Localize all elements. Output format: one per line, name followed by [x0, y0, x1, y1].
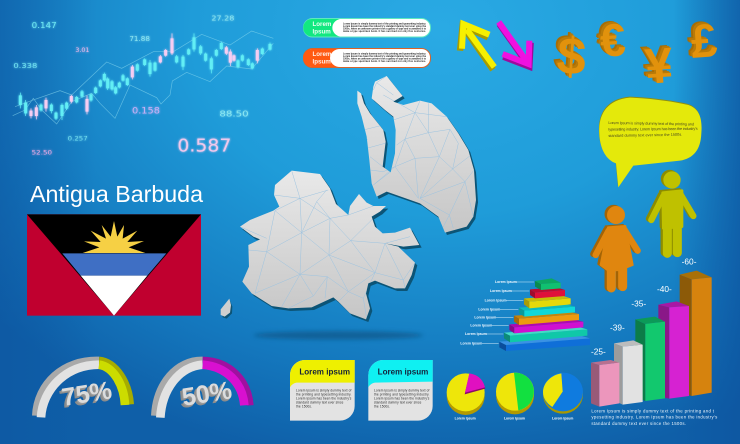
chart figures: 0.338 [13, 62, 37, 70]
layer green [535, 278, 561, 290]
info card cyan: Lorem ipsum [378, 367, 429, 377]
green label pill: Lorem Ipsum is simply dummy text of the printing and typesetting industry. [343, 22, 426, 26]
chart figures: 0.147 [32, 21, 57, 30]
layered pyramid chart [460, 278, 590, 351]
layer blue [499, 336, 590, 351]
bar values: -60- [682, 257, 697, 267]
info card yellow: standard dummy text ever since [296, 401, 344, 405]
bar values: -39- [610, 323, 625, 333]
chart figures: 88.50 [219, 108, 249, 118]
speech bubble: typesetting industry. Lorem Ipsum has been the industry's [608, 127, 698, 132]
bar pink 25 [591, 360, 619, 407]
pyramid labels: Lorem Ipsum [474, 315, 496, 319]
bar chart caption: standard dummy text ever since the 1500s. [591, 421, 686, 426]
bar chart caption: Lorem Ipsum is simply dummy text of the printing and t [591, 408, 715, 413]
green label pill: make a type specimen book. It has survived not only five centuries. [343, 30, 426, 33]
pyramid labels: Lorem Ipsum [490, 289, 512, 293]
pink candlesticks [31, 33, 257, 119]
green label pill: 1500s, when an unknown printer took a galley of type and scrambled it to [343, 28, 427, 30]
icon: dollar symbol: $ [555, 27, 588, 87]
info card yellow: the printing and typesetting industry. [296, 393, 351, 397]
bar chart [591, 257, 717, 426]
orange label pill: Ipsum [312, 58, 331, 66]
info card yellow: Lorem Ipsum is simply dummy text of [296, 389, 351, 393]
bar magenta 40 [658, 301, 689, 399]
icon: magenta arrow down-right [499, 22, 531, 67]
speech bubble [599, 97, 702, 187]
pie chart two [496, 373, 534, 420]
gauge value 75 percent: 75% [60, 376, 114, 412]
bar values: -35- [631, 299, 646, 309]
bar chart caption: ypesetting industry. Lorem Ipsum has been the industry's [591, 415, 717, 420]
green label pill: Lorem [312, 21, 332, 28]
flag of Antigua and Barbuda [27, 214, 201, 316]
info card cyan: Lorem Ipsum is simply dummy text of [374, 389, 429, 393]
chart figures: 27.28 [211, 15, 234, 23]
layer red [530, 287, 565, 298]
chart figures: 0.158 [132, 106, 160, 116]
layer cyan [519, 304, 575, 317]
icon: euro symbol: € [598, 13, 627, 67]
icon: yellow arrow up-left [460, 24, 494, 70]
bar green 35 [635, 317, 665, 401]
orange label pill: 1500s, when an unknown printer took a galley of type and scrambled it to [343, 58, 427, 60]
trend lines [13, 31, 273, 124]
icon: pound symbol: £ [689, 13, 719, 68]
icon: rising sun [83, 221, 145, 253]
green label pill: Lorem Ipsum has been the industry's standard dummy text ever since the [343, 25, 427, 28]
chart figures: 3.01 [75, 47, 89, 54]
title: Antigua Barbuda [30, 181, 203, 207]
layer teal [504, 327, 587, 342]
info card cyan: the printing and typesetting industry. [374, 393, 429, 397]
speech bubble: standard dummy text ever since the 1500s. [608, 133, 682, 138]
small islet [221, 299, 232, 319]
gauge value 50 percent: 50% [180, 376, 234, 412]
pie chart three [543, 373, 583, 420]
pyramid labels: Lorem Ipsum [478, 308, 500, 312]
cyan candlesticks [20, 33, 270, 120]
gauge 75 percent [35, 360, 131, 417]
pyramid leader lines [482, 282, 534, 343]
chart figures: 71.88 [129, 35, 150, 43]
info card cyan: Lorem Ipsum has been the industry's [374, 397, 430, 401]
info card yellow [290, 360, 355, 421]
info card cyan: the 1500s. [374, 405, 390, 409]
bar chart caption [591, 408, 717, 426]
chart figures: 0.587 [177, 136, 231, 156]
chart figures [13, 15, 249, 157]
layer yellow [524, 296, 571, 308]
pyramid labels: Lorem Ipsum [465, 332, 487, 336]
pyramid labels [460, 280, 517, 345]
Barbuda island [357, 76, 478, 235]
female figure [593, 205, 638, 288]
speech bubble: Lorem Ipsum is simply dummy text of the printing and [608, 121, 694, 126]
map ground shadow [253, 331, 423, 340]
green label pill: Ipsum [312, 28, 331, 36]
pyramid labels: Lorem Ipsum [460, 341, 482, 345]
info card cyan: standard dummy text ever since [374, 401, 422, 405]
orange label pill [303, 48, 430, 68]
orange label pill: Lorem [312, 51, 332, 58]
bar values: -40- [657, 284, 672, 294]
pie chart one [447, 373, 485, 420]
arrows [460, 22, 531, 70]
male figure [649, 170, 693, 253]
chart figures: 52.50 [32, 150, 52, 157]
pie chart three: Lorem Ipsum [552, 416, 573, 420]
pyramid labels: Lorem Ipsum [485, 299, 507, 303]
info card yellow: Lorem ipsum [299, 367, 350, 377]
info card cyan [368, 360, 433, 421]
info card yellow: the 1500s. [296, 405, 312, 409]
Antigua island [240, 171, 422, 322]
orange label pill: Lorem Ipsum is simply dummy text of the printing and typesetting industry. [343, 52, 426, 56]
pie chart two: Lorem Ipsum [504, 416, 525, 420]
pie chart one: Lorem Ipsum [455, 416, 476, 420]
bar white 39 [614, 340, 643, 405]
layer magenta [509, 320, 583, 333]
gauge 50 percent [154, 360, 250, 418]
icon: yen symbol: ¥ [643, 37, 675, 95]
bar values [591, 257, 697, 357]
chart figures: 0.257 [68, 135, 88, 142]
orange label pill: make a type specimen book. It has survived not only five centuries. [343, 60, 426, 63]
info card yellow: Lorem Ipsum has been the industry's [296, 397, 352, 401]
green label pill [303, 18, 430, 37]
bar values: -25- [591, 347, 606, 357]
pyramid labels: Lorem Ipsum [495, 280, 517, 284]
pyramid labels: Lorem Ipsum [470, 324, 492, 328]
bar orange 60 [680, 271, 712, 396]
orange label pill: Lorem Ipsum has been the industry's standard dummy text ever since the [343, 55, 427, 58]
stock chart with candlesticks and figures [13, 15, 273, 157]
layer orange [514, 312, 579, 325]
map of Antigua and Barbuda [221, 171, 423, 340]
